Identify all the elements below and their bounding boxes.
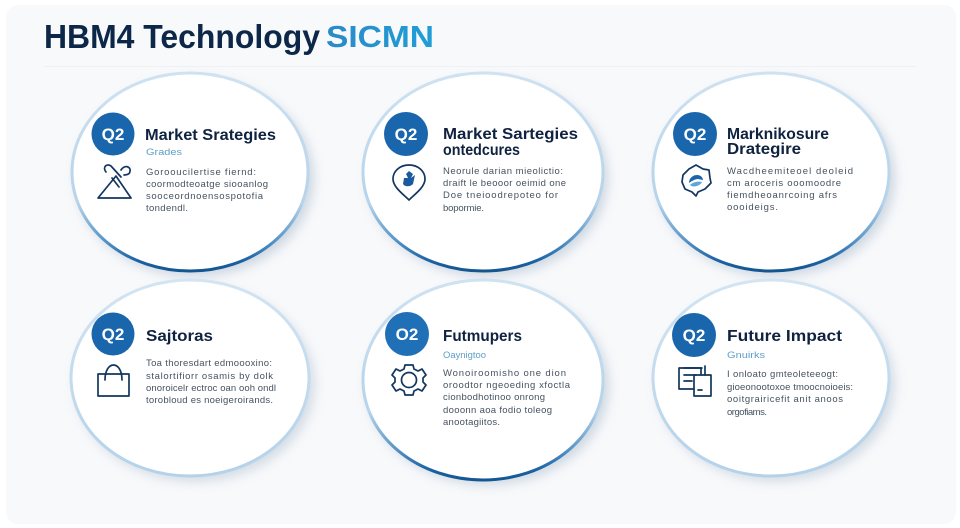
heading: Marknikosure <box>727 126 829 143</box>
heading: Futmupers <box>443 328 522 345</box>
heading <box>727 126 829 158</box>
panel: future impact <box>653 280 894 481</box>
subheading: Oaynigtoo <box>443 350 486 360</box>
body text: dooonn aoa fodio toleog <box>443 405 552 416</box>
body text: anootagiitos. <box>443 417 500 428</box>
body text <box>443 368 571 428</box>
icon: gear <box>392 365 426 395</box>
badge: Q2 <box>102 325 124 344</box>
body text: tondendl. <box>146 203 188 214</box>
body text: Doe tneioodrepoteo for <box>443 190 558 201</box>
body text: draift le beooor oeimid one <box>443 178 566 189</box>
badge: Q2 <box>683 326 705 345</box>
heading: Future Impact <box>727 328 843 345</box>
badge: Q2 <box>102 125 124 144</box>
body text: ooitgrairicefit anit anoos <box>727 394 843 405</box>
badge <box>92 112 134 156</box>
body text: coormodteoatge siooanlog <box>146 179 268 190</box>
badge: O2 <box>396 325 418 344</box>
body text: onoroicelr ectroc oan ooh ondl <box>146 383 276 394</box>
heading: Market Srategies <box>145 127 276 144</box>
body text: I onloato gmteoleteeogt: <box>727 369 838 380</box>
badge <box>92 312 134 356</box>
body text: Neorule darian mieolictio: <box>443 166 563 177</box>
body text: torobloud es noeigeroirands. <box>146 395 273 406</box>
heading: Drategire <box>727 141 801 158</box>
body text <box>443 166 566 214</box>
body text <box>727 166 853 213</box>
icon: shield pin <box>393 165 425 200</box>
icon: mountain <box>98 165 131 198</box>
badge: Q2 <box>684 125 706 144</box>
panel: market strategies <box>72 73 313 276</box>
badge <box>384 112 428 156</box>
body text: bopormie. <box>443 203 484 214</box>
body text: fiemdheoanrcoing afrs <box>727 190 837 201</box>
body text <box>146 358 276 406</box>
body text: gioeonootoxoe tmoocnoioeis: <box>727 382 853 393</box>
title: SICMN <box>326 19 434 54</box>
body text <box>727 369 853 418</box>
body text: oroodtor ngeoeding xfoctla <box>443 380 571 391</box>
panel: markniklosure strategies <box>653 73 894 276</box>
heading: ontedcures <box>443 142 520 159</box>
body text: cionbodhotinoo onrong <box>443 392 545 403</box>
body text: Wonoiroomisho one dion <box>443 368 566 379</box>
body text: Wacdheemiteoel deoleid <box>727 166 853 177</box>
panel: market sartegies <box>363 73 607 276</box>
heading <box>443 126 578 159</box>
heading: Sajtoras <box>146 328 213 345</box>
badge <box>672 313 716 357</box>
body text: oooideigs. <box>727 202 778 213</box>
body text: sooceordnoensospotofia <box>146 191 264 202</box>
subheading: Grades <box>146 147 183 157</box>
badge <box>385 312 429 356</box>
icon: bag <box>98 365 129 396</box>
subheading: Gnuirks <box>727 350 766 360</box>
body text: stalortifiorr osamis by dolk <box>146 371 273 382</box>
icon: documents <box>679 366 711 396</box>
body text: Gorooucilertise fiernd: <box>146 167 256 178</box>
body text: cm aroceris ooomoodre <box>727 178 841 189</box>
body text: orgofiams. <box>727 407 767 418</box>
panel: sajtoras <box>71 280 314 481</box>
badge <box>673 112 717 156</box>
body text <box>146 167 268 214</box>
icon: badge shield <box>682 165 711 196</box>
heading: Market Sartegies <box>443 126 578 143</box>
panel: futmupers <box>363 280 608 484</box>
badge: Q2 <box>395 125 417 144</box>
body text: Toa thoresdart edmoooxino: <box>146 358 272 369</box>
title: HBM4 Technology <box>44 18 321 55</box>
